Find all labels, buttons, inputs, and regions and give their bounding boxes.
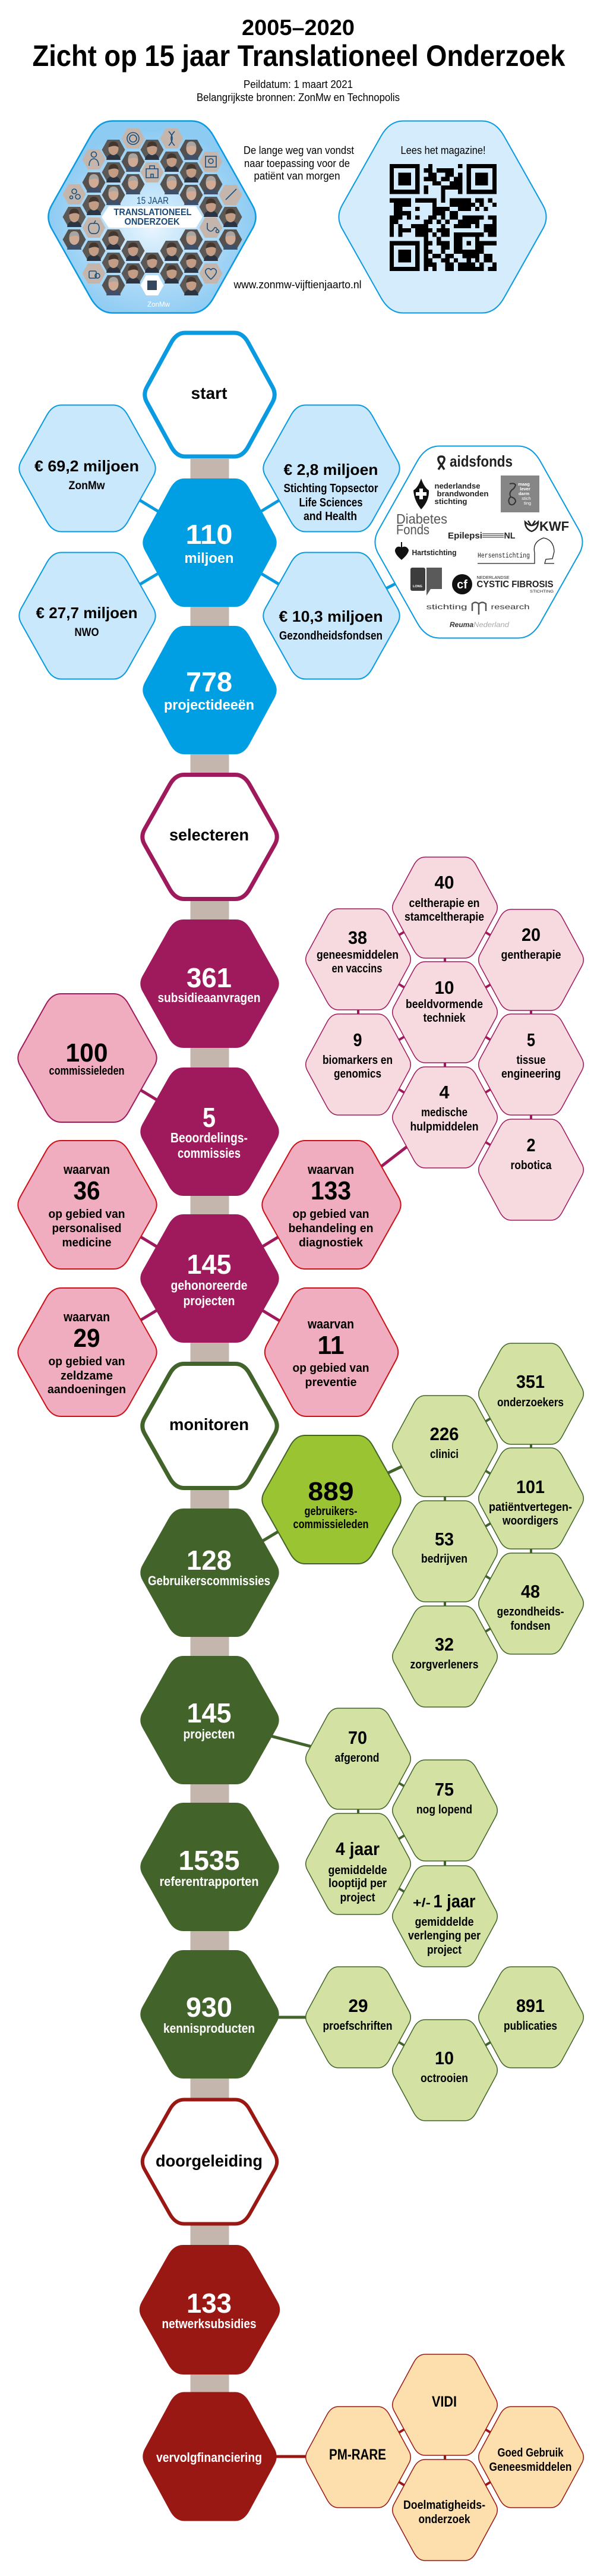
hexagon: 53 bedrijven: 53 — [435, 1529, 454, 1550]
logo: KWF — [525, 519, 569, 534]
cover text: translationeel: TRANSLATIONEEL — [114, 207, 192, 218]
hexagon: 110 miljoen: 110 — [185, 519, 233, 550]
hexagon: 128 Gebruikerscommissies: Gebruikerscommissies — [148, 1573, 270, 1588]
hexagon: 889 gebruikerscommissieleden: gebruikers- — [304, 1505, 358, 1518]
hexagon: 5 Beoordelingscommissies: commissies — [178, 1145, 241, 1161]
hexagon: 10 beeldvormende techniek: beeldvormende — [406, 998, 483, 1011]
hexagon: 9 biomarkers: genomics — [334, 1067, 381, 1081]
hexagon: 351 onderzoekers: 351 — [516, 1371, 545, 1392]
hexagon: 133 behandeling en diagnostiek: diagnostiek — [299, 1236, 364, 1249]
hexagon: 36 personalised medicine: op gebied van — [49, 1208, 125, 1221]
hexagon: 100 commissieleden: commissieleden — [49, 1065, 125, 1078]
text block: website: www.zonmw-vijftienjaarto.nl — [233, 279, 361, 291]
hexagon: 5 Beoordelingscommissies — [140, 1067, 279, 1196]
hexagon: +/- 1 jaar verlenging — [393, 1866, 497, 1967]
logo: maag lever darm stichting: lever — [520, 486, 530, 492]
hexagon: 891 publicaties: publicaties — [504, 2020, 557, 2033]
hexagon: 75 nog lopend: 75 — [435, 1779, 454, 1800]
logo: brandwonden stichting: nederlandse — [435, 481, 480, 490]
hexagon: 4 jaar looptijd: project — [340, 1891, 375, 1904]
hexagon: 778 projectideeen: projectideeën — [164, 697, 254, 713]
hexagon: 4 medische hulpmiddelen: 4 — [440, 1082, 450, 1103]
hexagon: 29 proefschriften: 29 — [348, 1995, 368, 2016]
hexagon: 10 beeldvormende techniek: 10 — [435, 977, 454, 998]
label: read the magazine: Lees het magazine! — [400, 144, 486, 156]
hexagon: 930 kennisproducten: kennisproducten — [163, 2021, 255, 2036]
hexagon: 36 personalised medicine: waarvan — [63, 1162, 110, 1177]
hexagon: 889 gebruikerscommissieleden: 889 — [308, 1477, 354, 1506]
hexagon: 778 projectideeen: 778 — [186, 666, 232, 697]
hexagon: 4 jaar looptijd: looptijd per — [328, 1877, 387, 1890]
hexagon: Goed Gebruik Geneesmiddelen: Geneesmiddelen — [489, 2461, 571, 2474]
hexagon: selecteren: selecteren — [169, 826, 249, 844]
hexagon: 29 zeldzame aandoeningen: aandoeningen — [48, 1383, 126, 1396]
hexagon: 145 gehonoreerde projecten: 145 — [187, 1249, 232, 1280]
hexagon: monitoren — [143, 1363, 277, 1488]
hexagon: Doelmatigheidsonderzoek: Doelmatigheids- — [403, 2499, 485, 2512]
panel: QR magazine hexagon — [339, 121, 546, 313]
hexagon: 351 onderzoekers — [479, 1343, 583, 1444]
hexagon: 128 Gebruikerscommissies: 128 — [187, 1545, 232, 1576]
hexagon: +/- 1 jaar verlenging: 1 jaar — [434, 1891, 475, 1911]
hexagon: 778 projectideeen — [143, 626, 277, 754]
hexagon: 53 bedrijven — [393, 1501, 497, 1602]
hexagon: 145 projecten: 145 — [187, 1698, 232, 1728]
hexagon: 5 tissue engineering: tissue — [517, 1054, 545, 1067]
hexagon: 4 jaar looptijd: 4 jaar — [336, 1838, 380, 1859]
hexagon: 361 subsidieaanvragen — [140, 919, 279, 1048]
text block: tagline: De lange weg van vondst — [244, 144, 354, 156]
logo: maag lever darm stichting: ting — [524, 500, 531, 506]
logo: brandwonden stichting: stichting — [435, 497, 467, 506]
hexagon: 145 projecten: projecten — [183, 1727, 235, 1742]
logo: ReumaNederland: Nederland — [473, 621, 509, 629]
logo: Cystic Fibrosis: NEDERLANDSE — [476, 576, 510, 580]
logo: Diabetes Fonds: Fonds — [396, 522, 429, 537]
hexagon: 10 beeldvormende techniek — [393, 962, 497, 1063]
hexagon: 361 subsidieaanvragen: subsidieaanvragen — [158, 990, 260, 1005]
hexagon: vervolgfinanciering: vervolgfinanciering — [156, 2450, 262, 2465]
hexagon: 70 afgerond: 70 — [348, 1727, 367, 1748]
logo: brandwonden stichting — [413, 478, 489, 509]
hexagon: 11 preventie — [265, 1288, 398, 1416]
hexagon: 133 behandeling en diagnostiek: 133 — [311, 1176, 351, 1205]
hexagon: Goed Gebruik Geneesmiddelen: Goed Gebruik — [498, 2446, 564, 2460]
hexagon: 1535 referentrapporten: 1535 — [178, 1845, 240, 1876]
hexagon: 4 medische hulpmiddelen: hulpmiddelen — [410, 1120, 479, 1133]
logo: Cystic Fibrosis: cf — [457, 578, 467, 591]
hexagon: +/- 1 jaar verlenging: verlenging per — [408, 1929, 481, 1942]
hexagon: 133 behandeling en diagnostiek: behandeling en — [289, 1222, 373, 1235]
logo: Cystic Fibrosis — [452, 574, 554, 594]
hexagon: NWO funding — [19, 553, 156, 679]
logo: Longfonds — [410, 568, 442, 596]
hexagon: 110 miljoen: miljoen — [184, 550, 234, 566]
hexagon: 101 patientvertegenwoordigers: woordigers — [502, 1514, 558, 1528]
logo: Cystic Fibrosis: CYSTIC FIBROSIS — [476, 580, 554, 590]
hexagon: VIDI: VIDI — [432, 2394, 457, 2410]
hexagon: 29 proefschriften — [306, 1967, 410, 2068]
hexagon: 32 zorgverleners: zorgverleners — [410, 1658, 479, 1671]
logo: stichting MS research: stichting — [426, 603, 467, 611]
hexagon: 9 biomarkers: 9 — [353, 1029, 362, 1050]
hexagon: Topsector funding: € 2,8 miljoen — [284, 461, 378, 478]
logo: aidsfonds: aidsfonds — [450, 452, 513, 470]
hexagon: 11 preventie: op gebied van — [292, 1362, 369, 1375]
logo: Hersenstichting — [478, 538, 554, 563]
hexagon: ZonMw funding: € 69,2 miljoen — [34, 457, 139, 475]
hexagon: 4 jaar looptijd: gemiddelde — [328, 1864, 387, 1877]
hexagon: 226 clinici: 226 — [430, 1424, 459, 1444]
hexagon: 29 proefschriften: proefschriften — [323, 2020, 392, 2033]
hexagon: 5 Beoordelingscommissies: 5 — [203, 1102, 216, 1133]
logo: Longfonds: LONG — [413, 585, 422, 588]
hexagon: 9 biomarkers: biomarkers en — [323, 1054, 393, 1067]
hexagon: 10 octrooien: octrooien — [421, 2072, 468, 2085]
hexagon: 11 preventie: waarvan — [307, 1317, 354, 1331]
hexagon: 36 personalised medicine: personalised — [52, 1222, 121, 1235]
hexagon: 101 patientvertegenwoordigers — [479, 1448, 583, 1549]
hexagon: 101 patientvertegenwoordigers: 101 — [516, 1476, 545, 1497]
hexagon: 29 zeldzame aandoeningen: 29 — [74, 1324, 100, 1353]
logo: EpilepsieNL — [448, 531, 516, 541]
hexagon: PM-RARE — [306, 2407, 410, 2508]
hexagon: Topsector funding — [263, 405, 400, 531]
hexagon: VIDI — [393, 2354, 497, 2455]
icon tiles — [63, 128, 242, 295]
cover text: 15 jaar: 15 JAAR — [137, 195, 169, 206]
hexagon: NWO funding: € 27,7 miljoen — [36, 604, 138, 622]
hexagon: 10 beeldvormende techniek: techniek — [423, 1012, 466, 1025]
hexagon: 48 gezondheidsfondsen: 48 — [521, 1581, 540, 1602]
cover logo: ZonMw: ZonMw — [147, 300, 170, 308]
hexagon: selecteren — [143, 775, 277, 899]
hexagon: 75 nog lopend — [393, 1760, 497, 1861]
logo: Hartstichting: Hartstichting — [412, 548, 457, 557]
hexagon: NWO funding: NWO — [75, 626, 99, 639]
hexagon: 891 publicaties — [479, 1967, 583, 2068]
hexagon: 226 clinici: clinici — [430, 1448, 459, 1461]
hexagon: 20 gentherapie: 20 — [522, 924, 541, 945]
hexagon: 133 netwerksubsidies: 133 — [187, 2288, 232, 2319]
hexagon: 70 afgerond: afgerond — [335, 1752, 379, 1765]
hexagon: 5 tissue engineering: 5 — [527, 1029, 535, 1050]
hexagon: 891 publicaties: 891 — [516, 1995, 545, 2016]
hexagon: 145 projecten — [140, 1656, 279, 1784]
hexagon: 1535 referentrapporten — [140, 1803, 279, 1931]
hexagon: 1535 referentrapporten: referentrapporten — [159, 1874, 259, 1889]
hexagon: 128 Gebruikerscommissies — [140, 1509, 279, 1637]
QR tile pattern — [147, 281, 157, 290]
hexagon: 40 celtherapie: stamceltherapie — [405, 911, 484, 924]
hexagon: 9 biomarkers — [306, 1014, 410, 1115]
connectors: monitoring — [210, 1394, 531, 2070]
hexagon: 29 zeldzame aandoeningen: waarvan — [63, 1309, 110, 1324]
hexagon: 75 nog lopend: nog lopend — [416, 1803, 472, 1816]
hexagon: 36 personalised medicine: 36 — [74, 1176, 100, 1205]
hexagon: 930 kennisproducten: 930 — [186, 1992, 232, 2023]
hexagon: monitoren: monitoren — [169, 1415, 249, 1434]
logo: maag lever darm stichting: stich — [522, 496, 531, 501]
logo: stichting MS research — [426, 603, 530, 615]
hexagon: 351 onderzoekers: onderzoekers — [497, 1396, 564, 1409]
hexagon: 889 gebruikerscommissieleden — [262, 1435, 401, 1564]
text block: tagline: patiënt van morgen — [254, 170, 340, 182]
hexagon: 29 zeldzame aandoeningen: zeldzame — [61, 1369, 113, 1383]
hexagon: Gezondheidsfondsen funding: € 10,3 miljoen — [279, 607, 383, 625]
hexagon: 38 geneesmiddelen: 38 — [348, 927, 367, 948]
hexagon: 53 bedrijven: bedrijven — [421, 1552, 467, 1566]
hexagon: 70 afgerond — [306, 1708, 410, 1809]
hexagon: 36 personalised medicine — [18, 1141, 157, 1269]
hexagon: 889 gebruikerscommissieleden: commissieleden — [293, 1518, 368, 1531]
hexagon: 2 robotica: 2 — [526, 1135, 536, 1155]
hexagon: 133 behandeling en diagnostiek — [262, 1141, 401, 1269]
hexagon: 100 commissieleden: 100 — [65, 1038, 108, 1067]
hexagon: 145 gehonoreerde projecten: projecten — [183, 1293, 235, 1308]
hexagon: +/- 1 jaar verlenging: project — [427, 1944, 462, 1957]
logo: Diabetes Fonds: Diabetes — [396, 511, 447, 527]
hexagon: +/- 1 jaar verlenging: +/- — [413, 1897, 431, 1910]
logo: EpilepsieNL: NL — [504, 531, 516, 541]
hexagon: 4 medische hulpmiddelen — [393, 1067, 497, 1168]
hexagon: 40 celtherapie: celtherapie en — [409, 897, 480, 910]
portrait mosaic — [63, 140, 242, 295]
hexagon: 38 geneesmiddelen: geneesmiddelen — [317, 949, 399, 962]
QR code — [390, 166, 497, 269]
hexagon: 133 behandeling en diagnostiek: op gebied van — [292, 1208, 369, 1221]
panel: health fund logos — [375, 446, 583, 638]
hexagon: 48 gezondheidsfondsen — [479, 1553, 583, 1654]
hexagon: 29 zeldzame aandoeningen — [18, 1288, 157, 1416]
hexagon: 48 gezondheidsfondsen: fondsen — [511, 1620, 550, 1633]
hexagon: doorgeleiding: doorgeleiding — [156, 2152, 263, 2170]
hexagon: 36 personalised medicine: medicine — [62, 1236, 112, 1249]
hexagon: Topsector funding: Life Sciences — [299, 496, 362, 509]
hexagon: 11 preventie: preventie — [305, 1376, 356, 1389]
hexagon: 133 behandeling en diagnostiek: waarvan — [307, 1162, 354, 1177]
hexagon: Goed Gebruik Geneesmiddelen — [479, 2407, 583, 2508]
hexagon: 32 zorgverleners: 32 — [435, 1634, 454, 1655]
hexagon: 38 geneesmiddelen — [306, 909, 410, 1010]
hexagon: 930 kennisproducten — [140, 1950, 279, 2079]
title block — [32, 15, 565, 103]
hexagon: 226 clinici — [393, 1396, 497, 1497]
hexagon: 2 robotica: robotica — [511, 1159, 552, 1172]
hexagon: 100 commissieleden — [18, 994, 157, 1122]
hexagon: 10 octrooien: 10 — [435, 2048, 454, 2068]
hexagon: 361 subsidieaanvragen: 361 — [187, 962, 232, 993]
hexagon: 110 miljoen — [143, 478, 277, 607]
logo: Cystic Fibrosis: STICHTING — [530, 590, 554, 594]
hexagon: 40 celtherapie — [393, 857, 497, 958]
cover title band — [102, 206, 203, 228]
hexagon: 48 gezondheidsfondsen: gezondheids- — [497, 1605, 564, 1618]
hexagon: Topsector funding: Stichting Topsector — [284, 482, 378, 495]
connectors: funding — [87, 468, 479, 616]
logo: Hersenstichting: Hersenstichting — [478, 552, 530, 560]
hexagon: 32 zorgverleners — [393, 1606, 497, 1707]
hexagon: 29 zeldzame aandoeningen: op gebied van — [49, 1355, 125, 1368]
logo: stichting MS research: research — [491, 603, 530, 611]
hexagon: Gezondheidsfondsen funding: Gezondheidsfondsen — [279, 629, 383, 643]
logo: Hartstichting — [395, 542, 457, 560]
hexagon: 20 gentherapie — [479, 909, 583, 1010]
hexagon: +/- 1 jaar verlenging: gemiddelde — [415, 1916, 474, 1929]
hexagon: ZonMw funding: ZonMw — [69, 480, 105, 492]
hexagon: 11 preventie: 11 — [317, 1331, 345, 1360]
hexagon: 2 robotica — [479, 1119, 583, 1220]
hexagon: 133 netwerksubsidies: netwerksubsidies — [162, 2316, 257, 2331]
hexagon: Gezondheidsfondsen funding — [263, 553, 400, 679]
hexagon: Doelmatigheidsonderzoek: onderzoek — [418, 2513, 470, 2526]
hexagon: ZonMw funding — [19, 405, 156, 531]
logo: EpilepsieNL: Epilepsi — [448, 531, 482, 541]
text block: tagline — [244, 144, 354, 182]
logo: Diabetes Fonds — [396, 511, 447, 537]
hexagon: 133 netwerksubsidies — [140, 2245, 280, 2375]
hexagon: 38 geneesmiddelen: en vaccins — [331, 962, 383, 975]
logo: brandwonden stichting: brandwonden — [437, 489, 489, 498]
hexagon: 5 tissue engineering — [479, 1014, 583, 1115]
hexagon: 5 Beoordelingscommissies: Beoordelings- — [170, 1130, 248, 1145]
hexagon: doorgeleiding — [143, 2099, 277, 2224]
hexagon: 5 tissue engineering: engineering — [501, 1067, 561, 1081]
connectors: follow-up — [210, 2405, 531, 2510]
hexagon: start — [145, 333, 274, 456]
hexagon: 20 gentherapie: gentherapie — [501, 949, 561, 962]
hexagon: PM-RARE: PM-RARE — [329, 2446, 386, 2463]
subtitle: sources: Belangrijkste bronnen: ZonMw en Technopolis — [197, 92, 400, 103]
hexagon: 10 octrooien — [393, 2020, 497, 2121]
spine: central connecting bar — [190, 459, 229, 2397]
cover text: onderzoek: ONDERZOEK — [125, 217, 180, 227]
logo: ReumaNederland: Reuma — [450, 621, 473, 629]
panel: magazine cover hexagon with portraits — [48, 121, 256, 313]
logo: maag lever darm stichting — [501, 475, 539, 512]
logo: maag lever darm stichting: darm — [519, 491, 529, 496]
hexagon: 4 jaar looptijd — [306, 1813, 410, 1914]
hexagon: 145 gehonoreerde projecten — [140, 1214, 279, 1343]
connectors: selection — [87, 908, 531, 1352]
hexagon: Topsector funding: and Health — [304, 510, 357, 523]
hexagon: 40 celtherapie: 40 — [435, 872, 454, 893]
hexagon: start: start — [191, 384, 227, 402]
hexagon: 145 gehonoreerde projecten: gehonoreerde — [171, 1278, 247, 1293]
logo: maag lever darm stichting: maag — [518, 481, 530, 487]
logo: ReumaNederland — [450, 621, 509, 629]
hexagon: vervolgfinanciering — [143, 2392, 277, 2521]
text block: tagline: naar toepassing voor de — [244, 158, 350, 169]
hexagon: 4 medische hulpmiddelen: medische — [421, 1106, 467, 1119]
title: years: 2005–2020 — [242, 15, 355, 40]
logo: KWF: KWF — [539, 519, 569, 534]
hexagon: Doelmatigheidsonderzoek — [393, 2460, 497, 2561]
hexagon: 101 patientvertegenwoordigers: patiëntvertegen- — [489, 1501, 572, 1514]
subtitle: reference date: Peildatum: 1 maart 2021 — [244, 78, 353, 90]
